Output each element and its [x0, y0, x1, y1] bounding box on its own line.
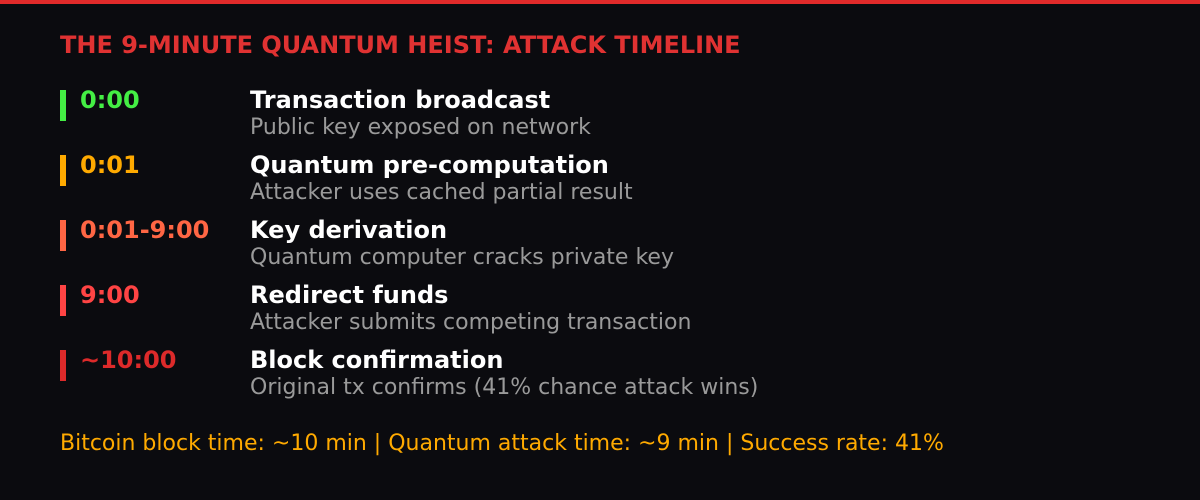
- heading: Key derivation: [250, 216, 447, 244]
- heading: Transaction broadcast: [250, 86, 550, 114]
- marker: [60, 90, 66, 121]
- heading: Quantum pre-computation: [250, 151, 609, 179]
- time: 0:00: [80, 86, 140, 114]
- heading: Redirect funds: [250, 281, 448, 309]
- row: 0:00: [60, 86, 591, 140]
- description: Attacker submits competing transaction: [250, 310, 691, 335]
- title: THE 9-MINUTE QUANTUM HEIST: ATTACK TIMELINE: [60, 31, 741, 59]
- row: key derivation: [60, 216, 674, 270]
- time: ~10:00: [80, 346, 177, 374]
- description: Quantum computer cracks private key: [250, 245, 674, 270]
- row: 9:00: [60, 281, 691, 335]
- marker: [60, 350, 66, 381]
- marker: [60, 285, 66, 316]
- time: 0:01: [80, 151, 140, 179]
- row: 0:01: [60, 151, 633, 205]
- time: 0:01-9:00: [80, 216, 209, 244]
- time: 9:00: [80, 281, 140, 309]
- description: Attacker uses cached partial result: [250, 180, 633, 205]
- description: Original tx confirms (41% chance attack wins): [250, 375, 758, 400]
- heading: Block confirmation: [250, 346, 503, 374]
- marker: [60, 220, 66, 251]
- description: Public key exposed on network: [250, 115, 591, 140]
- footer summary: Bitcoin block time: ~10 min | Quantum attack time: ~9 min | Success rate: 41%: [60, 431, 944, 456]
- row: ~10:00: [60, 346, 758, 400]
- marker: [60, 155, 66, 186]
- top accent bar: [0, 0, 1200, 4]
